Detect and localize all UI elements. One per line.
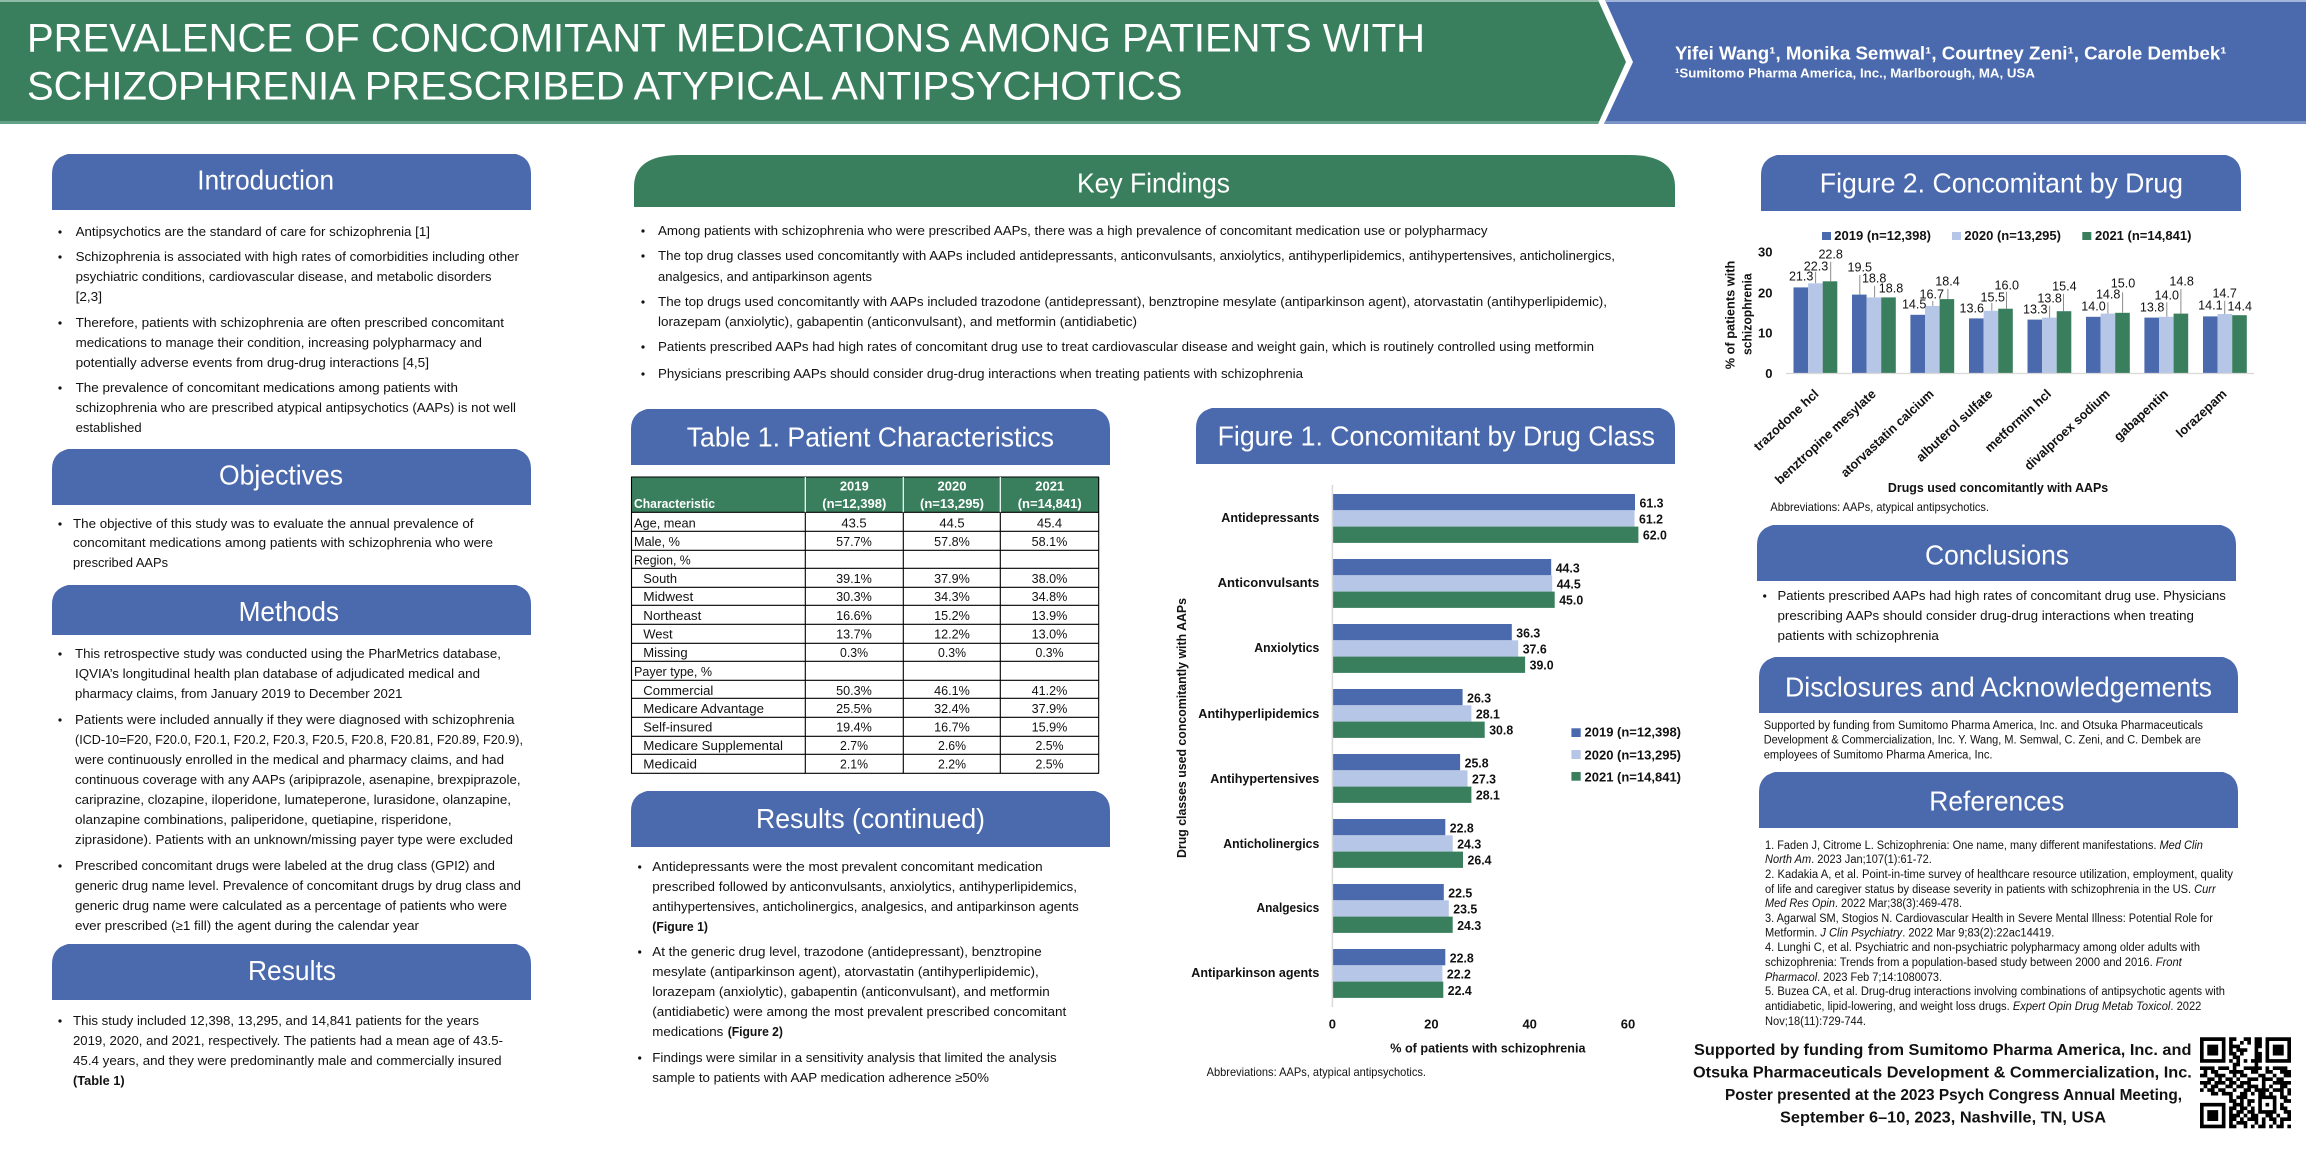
table values 2021: 41.2% [1032, 683, 1068, 698]
table values 2019: 2.1% [840, 757, 868, 772]
value labels: 14.0 [2081, 299, 2106, 314]
value labels: 14.0 [2155, 288, 2179, 303]
text block: results bullet: 2019, 2020, and 2021, respectively. The patients had a mean age of 43.5- [73, 1033, 503, 1048]
category labels: benztropine mesylate [1772, 386, 1879, 487]
text block: objectives bullet: concomitant medications among patients with schizophrenia who were [73, 535, 493, 550]
affiliation: ¹Sumitomo Pharma America, Inc., Marlborough, MA, USA [1675, 66, 2036, 81]
heading: table 1 [631, 409, 1110, 465]
text block: objectives bullet: prescribed AAPs [73, 555, 168, 570]
bars: 2021 series [1333, 527, 1638, 998]
table values 2019 [836, 515, 872, 772]
category labels: albuterol sulfate [1913, 386, 1996, 465]
panel: results continued [631, 791, 1110, 1085]
text block: methods bullets: This retrospective study was conducted using the PharMetrics database, [75, 646, 501, 661]
heading: key findings: Key Findings [1077, 168, 1230, 199]
table header row: 2020 [938, 479, 966, 494]
value labels: 36.3 [1516, 625, 1540, 640]
table row labels: Payer type, % [634, 664, 712, 679]
heading: introduction [52, 154, 531, 210]
text block: results continued bullets: prescribed followed by anticonvulsants, anxiolytics, antihyperlipidemics, [652, 879, 1077, 894]
panel: figure 2 concomitant by drug [1723, 155, 2254, 514]
table values 2020: 34.3% [934, 589, 970, 604]
value labels: 18.8 [1862, 271, 1886, 286]
text block: conclusions bullet: Patients prescribed AAPs had high rates of concomitant drug use. Physicians [1778, 588, 2226, 603]
text block: results continued bullets: (Figure 2) [728, 1024, 783, 1039]
callout: funding and presentation statement: Otsuka Pharmaceuticals Development & Commercialization, Inc. [1693, 1065, 2192, 1082]
value labels: 24.3 [1457, 918, 1481, 933]
columns: 2021 series [1823, 281, 2247, 373]
category labels: Antihypertensives [1210, 771, 1319, 786]
table row labels: Medicaid [643, 757, 697, 772]
value labels: 39.0 [1530, 657, 1554, 672]
text block: introduction bullets: medications to manage their condition, increasing polypharmacy and [76, 335, 482, 350]
heading: conclusions: Conclusions [1925, 539, 2069, 570]
heading: objectives [52, 449, 531, 505]
table values 2020: 46.1% [934, 683, 970, 698]
heading: figure 1: Figure 1. Concomitant by Drug Class [1218, 420, 1655, 451]
value labels: 26.4 [1468, 852, 1492, 867]
table values 2020 [934, 515, 970, 772]
table values 2021: 13.9% [1032, 608, 1068, 623]
text block: methods bullets: (ICD-10=F20, F20.0, F20.1, F20.2, F20.3, F20.5, F20.8, F20.81, F20.89, F20.9), [75, 732, 523, 747]
text block: reference list: North Am. 2023 Jan;107(1):61-72. [1765, 854, 1932, 866]
legend [1571, 724, 1681, 784]
table values 2020: 15.2% [934, 608, 970, 623]
table values 2020: 2.6% [938, 738, 966, 753]
value labels: 44.3 [1556, 560, 1580, 575]
heading: results continued [631, 791, 1110, 847]
table values 2019: 13.7% [836, 627, 872, 642]
y axis ticks: 10 [1758, 325, 1772, 340]
columns: 2020 series [1808, 283, 2232, 373]
category labels: Antidepressants [1221, 510, 1319, 525]
text block: reference list [1765, 840, 2233, 1028]
table row labels: Missing [643, 645, 688, 660]
value labels: 19.5 [1848, 260, 1872, 275]
y axis ticks: 30 [1758, 244, 1772, 259]
text block: reference list: 2. Kadakia A, et al. Point-in-time survey of healthcare resource utilization, employment, quality [1765, 869, 2233, 881]
y axis title: % of patients with [1723, 261, 1738, 369]
value labels: 22.2 [1447, 966, 1471, 981]
value labels: 27.3 [1472, 771, 1496, 786]
text block: introduction bullets: schizophrenia who are prescribed atypical antipsychotics (AAPs) is not well [76, 400, 516, 415]
value labels: 21.3 [1789, 269, 1813, 284]
heading: methods [52, 585, 531, 635]
callout: funding and presentation statement: September 6–10, 2023, Nashville, TN, USA [1780, 1110, 2106, 1127]
table: patient characteristics [631, 477, 1099, 773]
value labels: 45.0 [1559, 592, 1583, 607]
category labels: Analgesics [1256, 900, 1319, 915]
table values 2021: 13.0% [1032, 627, 1068, 642]
legend: 2021 (n=14,841) [1584, 769, 1681, 784]
abbreviations note: figure 2: Abbreviations: AAPs, atypical antipsychotics. [1770, 500, 1989, 514]
value labels: 22.8 [1450, 820, 1474, 835]
table values 2019: 2.7% [840, 738, 868, 753]
text block: key findings bullets: Patients prescribed AAPs had high rates of concomitant drug use to treat cardiovascular disease and weight gain, which is routinely controlled using metformin [658, 339, 1594, 354]
value labels: 13.8 [2037, 291, 2062, 306]
text block: reference list: of life and caregiver status by disease severity in patients with schizophrenia in the US. Curr [1765, 884, 2217, 896]
table values 2021: 2.5% [1036, 738, 1064, 753]
table row labels: Northeast [643, 608, 702, 623]
heading: figure 1 [1196, 408, 1675, 464]
table header row [634, 479, 1082, 511]
heading: table 1: Table 1. Patient Characteristics [687, 422, 1054, 453]
category labels: atorvastatin calcium [1838, 386, 1937, 480]
text block: reference list: Nov;18(11):729-744. [1765, 1016, 1866, 1028]
y axis title: Drug classes used concomitantly with AAPs [1174, 598, 1189, 858]
banner: blue authors chevron [1604, 0, 2306, 124]
table values 2021 [1032, 515, 1068, 772]
text block: reference list: schizophrenia: Trends from a population-based study between 2000 and 2016. Front [1765, 957, 2183, 969]
text block: key findings bullets: Physicians prescribing AAPs should consider drug-drug interactions when treating patients with schizophrenia [658, 366, 1304, 381]
category labels: metformin hcl [1982, 386, 2054, 455]
value labels: 16.0 [1995, 278, 2019, 293]
table header row: 2019 [840, 479, 869, 494]
title [27, 17, 1425, 108]
table row labels: Self-insured [643, 720, 712, 735]
value labels: 15.0 [2111, 276, 2135, 291]
category labels: gabapentin [2111, 386, 2171, 444]
table values 2019: 50.3% [836, 683, 872, 698]
heading: introduction: Introduction [197, 164, 334, 195]
x axis tick labels: 0 [1329, 1017, 1336, 1032]
text block: reference list: 1. Faden J, Citrome L. Schizophrenia: One name, many different manifestations. Med Clin [1765, 840, 2203, 852]
heading: references: References [1929, 786, 2064, 817]
table values 2021: 34.8% [1032, 589, 1068, 604]
text block: results continued bullets: At the generic drug level, trazodone (antidepressant), benztropine [652, 944, 1042, 959]
table values 2019: 30.3% [836, 589, 872, 604]
heading: disclosures [1759, 657, 2238, 713]
text block: methods bullets: Prescribed concomitant drugs were labeled at the drug class (GPI2) and [75, 858, 495, 873]
x axis title: % of patients with schizophrenia [1390, 1041, 1586, 1056]
text block: results bullet: 45.4 years, and they were predominantly male and commercially insured [73, 1053, 502, 1068]
table values 2019: 16.6% [836, 608, 872, 623]
table row labels: Region, % [634, 552, 691, 567]
table header row: (n=12,398) [822, 496, 886, 511]
text block: methods bullets: generic drug name were calculated as a percentage of patients who were [75, 898, 507, 913]
text block: conclusions bullet: patients with schizophrenia [1778, 628, 1940, 643]
category labels: Antiparkinson agents [1191, 965, 1319, 980]
text block: methods bullets: continuous coverage with any AAPs (aripiprazole, asenapine, brexpiprazole, [75, 772, 520, 787]
text block: key findings bullets [641, 223, 1615, 381]
text block: objectives bullet [58, 516, 493, 570]
text block: methods bullets: generic drug name level. Prevalence of concomitant drugs by drug class and [75, 878, 521, 893]
heading: references [1759, 772, 2238, 828]
text block: introduction bullets: established [76, 420, 142, 435]
text block: results continued bullets: Findings were similar in a sensitivity analysis that limited the analysis [652, 1050, 1057, 1065]
value labels: 15.4 [2052, 278, 2077, 293]
x axis title: Drugs used concomitantly with AAPs [1888, 480, 2108, 495]
text block: key findings bullets: lorazepam (anxiolytic), gabapentin (anticonvulsant), and metformin (antidiabetic) [658, 314, 1137, 329]
heading: objectives: Objectives [219, 460, 343, 491]
panel: references [1759, 772, 2238, 1028]
value labels: 18.4 [1935, 274, 1960, 289]
category labels: lorazepam [2173, 386, 2230, 440]
text block: results bullet: (Table 1) [73, 1073, 125, 1088]
table header row: 2021 [1035, 479, 1064, 494]
panel: methods [52, 585, 531, 933]
text block: disclosures: Supported by funding from Sumitomo Pharma America, Inc. and Otsuka Pharmaceuticals [1764, 720, 2203, 732]
panel: conclusions [1757, 525, 2236, 643]
y axis title [1723, 261, 1754, 369]
panel: key findings [634, 155, 1675, 381]
panel: figure 1 concomitant by drug class [1174, 408, 1681, 1079]
table values 2019: 43.5 [841, 515, 867, 530]
text block: disclosures: Development & Commercialization, Inc. Y. Wang, M. Semwal, C. Zeni, and C. Dembek are [1764, 734, 2201, 746]
legend: figure 2 [1822, 228, 2191, 243]
table values 2021: 45.4 [1037, 515, 1062, 530]
text block: introduction bullets: potentially adverse events from drug-drug interactions [4,5] [76, 355, 429, 370]
text block: methods bullets [58, 646, 523, 933]
leader lines [1816, 262, 2225, 318]
value labels [1447, 495, 1667, 998]
heading: results [52, 944, 531, 1000]
panel: objectives [52, 449, 531, 570]
value labels: 14.7 [2212, 286, 2237, 301]
text block: introduction bullets: Therefore, patients with schizophrenia are often prescribed concomitant [76, 315, 504, 330]
table row labels: Medicare Supplemental [643, 738, 783, 753]
x axis tick labels: 60 [1621, 1017, 1635, 1032]
callout: funding and presentation statement: Poster presented at the 2023 Psych Congress Annual Meeting, [1725, 1087, 2182, 1104]
table values 2020: 16.7% [934, 720, 970, 735]
category labels: Anxiolytics [1254, 640, 1319, 655]
table header row: (n=13,295) [920, 496, 984, 511]
text block: key findings bullets: The top drug classes used concomitantly with AAPs included antidepressants, anticonvulsants, anxiolytics, antihyperlipidemics, antihypertensives, anticholinergics, [658, 248, 1615, 263]
text block: key findings bullets: The top drugs used concomitantly with AAPs included trazodone (antidepressant), benztropine mesylate (antiparkinson agent), atorvastatin (antihyperlipidemic), [658, 294, 1607, 309]
text block: reference list: 4. Lunghi C, et al. Psychiatric and non-psychiatric polypharmacy among older adults with [1765, 942, 2200, 954]
text block: results continued bullets: medications [652, 1024, 724, 1039]
table values 2021: 37.9% [1032, 701, 1068, 716]
value labels: 22.8 [1818, 247, 1843, 262]
value labels: 14.8 [2096, 287, 2120, 302]
value labels: 25.8 [1465, 755, 1489, 770]
text block: reference list: 3. Agarwal SM, Stogios N. Cardiovascular Health in Severe Mental Illness: Potential Role for [1765, 913, 2213, 925]
value labels: 28.1 [1476, 706, 1500, 721]
text block: conclusions bullet [1763, 588, 2226, 643]
value labels: 37.6 [1523, 641, 1547, 656]
category labels: Antihyperlipidemics [1198, 706, 1319, 721]
text block: key findings bullets: Among patients with schizophrenia who were prescribed AAPs, there was a high prevalence of concomitant medication use or polypharmacy [658, 223, 1488, 238]
table row labels: Male, % [634, 534, 680, 549]
text block: reference list: Metformin. J Clin Psychiatry. 2022 Mar 9;83(2):22ac14419. [1765, 928, 2054, 940]
title: PREVALENCE OF CONCOMITANT MEDICATIONS AMONG PATIENTS WITH [27, 17, 1425, 61]
value labels: 14.8 [2169, 274, 2194, 289]
text block: methods bullets: olanzapine combinations, paliperidone, quetiapine, risperidone, [75, 812, 452, 827]
x axis tick labels: 20 [1424, 1017, 1439, 1032]
heading: figure 2 [1761, 155, 2241, 211]
text block: results bullet: This study included 12,398, 13,295, and 14,841 patients for the years [73, 1013, 480, 1028]
value labels: 15.5 [1981, 290, 2005, 305]
table row labels: South [643, 571, 677, 586]
column chart: drugs [1723, 244, 2254, 495]
y axis ticks: 20 [1758, 285, 1772, 300]
text block: methods bullets: cariprazine, clozapine, iloperidone, lumateperone, lurasidone, olanzapine, [75, 792, 511, 807]
value labels: 23.5 [1453, 901, 1477, 916]
bar chart: drug classes [1174, 485, 1681, 1056]
text block: results continued bullets: (antidiabetic) were among the most prevalent prescribed concomitant [652, 1004, 1067, 1019]
table values 2020: 2.2% [938, 757, 966, 772]
text block: disclosures [1764, 720, 2203, 761]
text block: results continued bullets: lorazepam (anxiolytic), gabapentin (anticonvulsant), and metformin [652, 984, 1050, 999]
legend: 2020 (n=13,295) [1584, 747, 1681, 762]
text block: methods bullets: IQVIA’s longitudinal health plan database of adjudicated medical and [75, 666, 480, 681]
callout: funding and presentation statement: Supported by funding from Sumitomo Pharma America, Inc. and [1694, 1042, 2191, 1059]
text block: methods bullets: ever prescribed (≥1 fill) the agent during the calendar year [75, 918, 420, 933]
table row labels: Age, mean [634, 515, 696, 530]
text block: disclosures: employees of Sumitomo Pharma America, Inc. [1764, 749, 1992, 761]
value labels: 16.7 [1920, 286, 1944, 301]
table values 2021: 58.1% [1032, 534, 1068, 549]
abbreviations note: figure 1: Abbreviations: AAPs, atypical antipsychotics. [1207, 1065, 1426, 1079]
banner: green title chevron [0, 0, 1626, 124]
text block: reference list: antidiabetic, lipid-lowering, and weight loss drugs. Expert Opin Drug Metab Toxicol. 2022 [1765, 1001, 2201, 1013]
authors: Yifei Wang¹, Monika Semwal¹, Courtney Zeni¹, Carole Dembek¹ [1675, 43, 2226, 63]
callout: funding and presentation statement [1693, 1042, 2192, 1127]
table values 2019: 0.3% [840, 645, 868, 660]
x axis tick labels [1329, 1017, 1635, 1032]
heading: disclosures: Disclosures and Acknowledgements [1785, 671, 2212, 702]
columns: 2019 series [1794, 287, 2218, 373]
table values 2020: 37.9% [934, 571, 970, 586]
title: SCHIZOPHRENIA PRESCRIBED ATYPICAL ANTIPSYCHOTICS [27, 64, 1182, 108]
value labels [1789, 247, 2252, 317]
table row labels: Midwest [643, 589, 694, 604]
text block: introduction bullets [58, 224, 520, 435]
text block: results continued bullets: antihypertensives, anticholinergics, analgesics, and antiparkinson agents [652, 899, 1079, 914]
heading: key findings [634, 155, 1675, 207]
y axis ticks: 0 [1765, 366, 1772, 381]
table header row: Characteristic [634, 496, 715, 511]
bars: 2019 series [1333, 494, 1635, 965]
table values 2019: 25.5% [836, 701, 872, 716]
value labels: 13.6 [1960, 301, 1984, 316]
y axis title: schizophrenia [1739, 273, 1754, 355]
table values 2020: 12.2% [934, 627, 970, 642]
heading: results: Results [248, 955, 336, 986]
panel: introduction [52, 154, 531, 435]
text block: introduction bullets: The prevalence of concomitant medications among patients with [76, 380, 458, 395]
text block: methods bullets: ziprasidone). Patients with an unknown/missing payer type were excluded [75, 832, 513, 847]
table row labels: West [643, 627, 673, 642]
category labels: divalproex sodium [2021, 386, 2113, 473]
value labels: 18.8 [1879, 281, 1903, 296]
heading: conclusions [1757, 525, 2236, 581]
table header row: (n=14,841) [1018, 496, 1082, 511]
category labels: Anticholinergics [1223, 836, 1319, 851]
legend: figure 2: 2020 (n=13,295) [1964, 228, 2061, 243]
value labels: 14.4 [2228, 298, 2252, 313]
table values 2020: 44.5 [939, 515, 965, 530]
legend: 2019 (n=12,398) [1584, 724, 1681, 739]
text block: results continued bullets: sample to patients with AAP medication adherence ≥50% [652, 1070, 989, 1085]
text block: results continued bullets: mesylate (antiparkinson agent), atorvastatin (antihyperlipidemic), [652, 964, 1039, 979]
table values 2019: 39.1% [836, 571, 872, 586]
text block: key findings bullets: analgesics, and antiparkinson agents [658, 269, 872, 284]
text block: methods bullets: Patients were included annually if they were diagnosed with schizophrenia [75, 712, 515, 727]
text block: results continued bullets [638, 859, 1079, 1085]
panel: table 1 patient characteristics [631, 409, 1110, 773]
text block: objectives bullet: The objective of this study was to evaluate the annual prevalence of [73, 516, 474, 531]
text block: methods bullets: were continuously enrolled in the medical and pharmacy claims, and had [74, 752, 504, 767]
text block: reference list: Med Res Opin. 2022 Mar;38(3):469-478. [1765, 898, 1962, 910]
text block: reference list: 5. Buzea CA, et al. Drug-drug interactions involving combinations of antipsychotic agents with [1765, 986, 2225, 998]
value labels: 14.5 [1902, 296, 1926, 311]
value labels: 24.3 [1457, 836, 1481, 851]
legend: figure 2: 2019 (n=12,398) [1834, 228, 1931, 243]
heading: methods: Methods [239, 596, 339, 627]
table values 2019: 57.7% [836, 534, 872, 549]
table values 2021: 2.5% [1036, 757, 1064, 772]
panel: results [52, 944, 531, 1088]
table values 2019: 19.4% [836, 720, 872, 735]
text block: reference list: Pharmacol. 2023 Feb 7;14:1080073. [1765, 972, 1942, 984]
category labels [1751, 386, 2230, 487]
table values 2020: 32.4% [934, 701, 970, 716]
table row labels: Medicare Advantage [643, 701, 764, 716]
bars: 2020 series [1333, 510, 1634, 982]
value labels: 62.0 [1643, 527, 1667, 542]
value labels: 13.3 [2023, 302, 2048, 317]
table row labels: Commercial [643, 683, 713, 698]
table row labels [634, 515, 783, 772]
value labels: 26.3 [1467, 690, 1491, 705]
heading: results continued: Results (continued) [756, 803, 985, 834]
text block: results continued bullets: Antidepressants were the most prevalent concomitant medication [652, 859, 1043, 874]
x axis tick labels: 40 [1522, 1017, 1537, 1032]
value labels: 14.1 [2198, 298, 2223, 313]
table values 2020: 57.8% [934, 534, 970, 549]
text block: introduction bullets: Schizophrenia is associated with high rates of comorbidities including other [76, 249, 520, 264]
panel: disclosures and acknowledgements [1759, 657, 2238, 761]
value labels: 22.3 [1804, 259, 1828, 274]
category labels: trazodone hcl [1751, 386, 1822, 454]
banner: title and authors [0, 0, 2306, 124]
text block: conclusions bullet: prescribing AAPs should consider drug-drug interactions when treating [1778, 608, 2194, 623]
value labels: 13.8 [2140, 300, 2164, 315]
text block: introduction bullets: [2,3] [76, 289, 102, 304]
value labels: 61.2 [1639, 511, 1663, 526]
table values 2021: 0.3% [1036, 645, 1064, 660]
value labels: 22.8 [1450, 950, 1474, 965]
value labels: 28.1 [1476, 787, 1500, 802]
category labels: Anticonvulsants [1218, 575, 1319, 590]
value labels: 30.8 [1489, 722, 1513, 737]
table values 2021: 15.9% [1032, 720, 1068, 735]
table values 2020: 0.3% [938, 645, 966, 660]
category labels [1191, 510, 1319, 980]
legend: figure 2: 2021 (n=14,841) [2095, 228, 2191, 243]
value labels: 22.4 [1448, 983, 1473, 998]
text block: introduction bullets: psychiatric conditions, cardiovascular disease, and metabolic disorders [76, 269, 492, 284]
y axis ticks [1758, 244, 1772, 381]
text block: results continued bullets: (Figure 1) [652, 919, 708, 934]
value labels: 44.5 [1557, 576, 1581, 591]
value labels: 22.5 [1448, 885, 1472, 900]
icon: QR code [2200, 1039, 2291, 1126]
text block: methods bullets: pharmacy claims, from January 2019 to December 2021 [75, 686, 403, 701]
value labels: 61.3 [1640, 495, 1664, 510]
table values 2021: 38.0% [1032, 571, 1068, 586]
text block: results bullet [58, 1013, 503, 1088]
heading: figure 2: Figure 2. Concomitant by Drug [1820, 168, 2183, 199]
text block: introduction bullets: Antipsychotics are the standard of care for schizophrenia [1] [76, 224, 430, 239]
